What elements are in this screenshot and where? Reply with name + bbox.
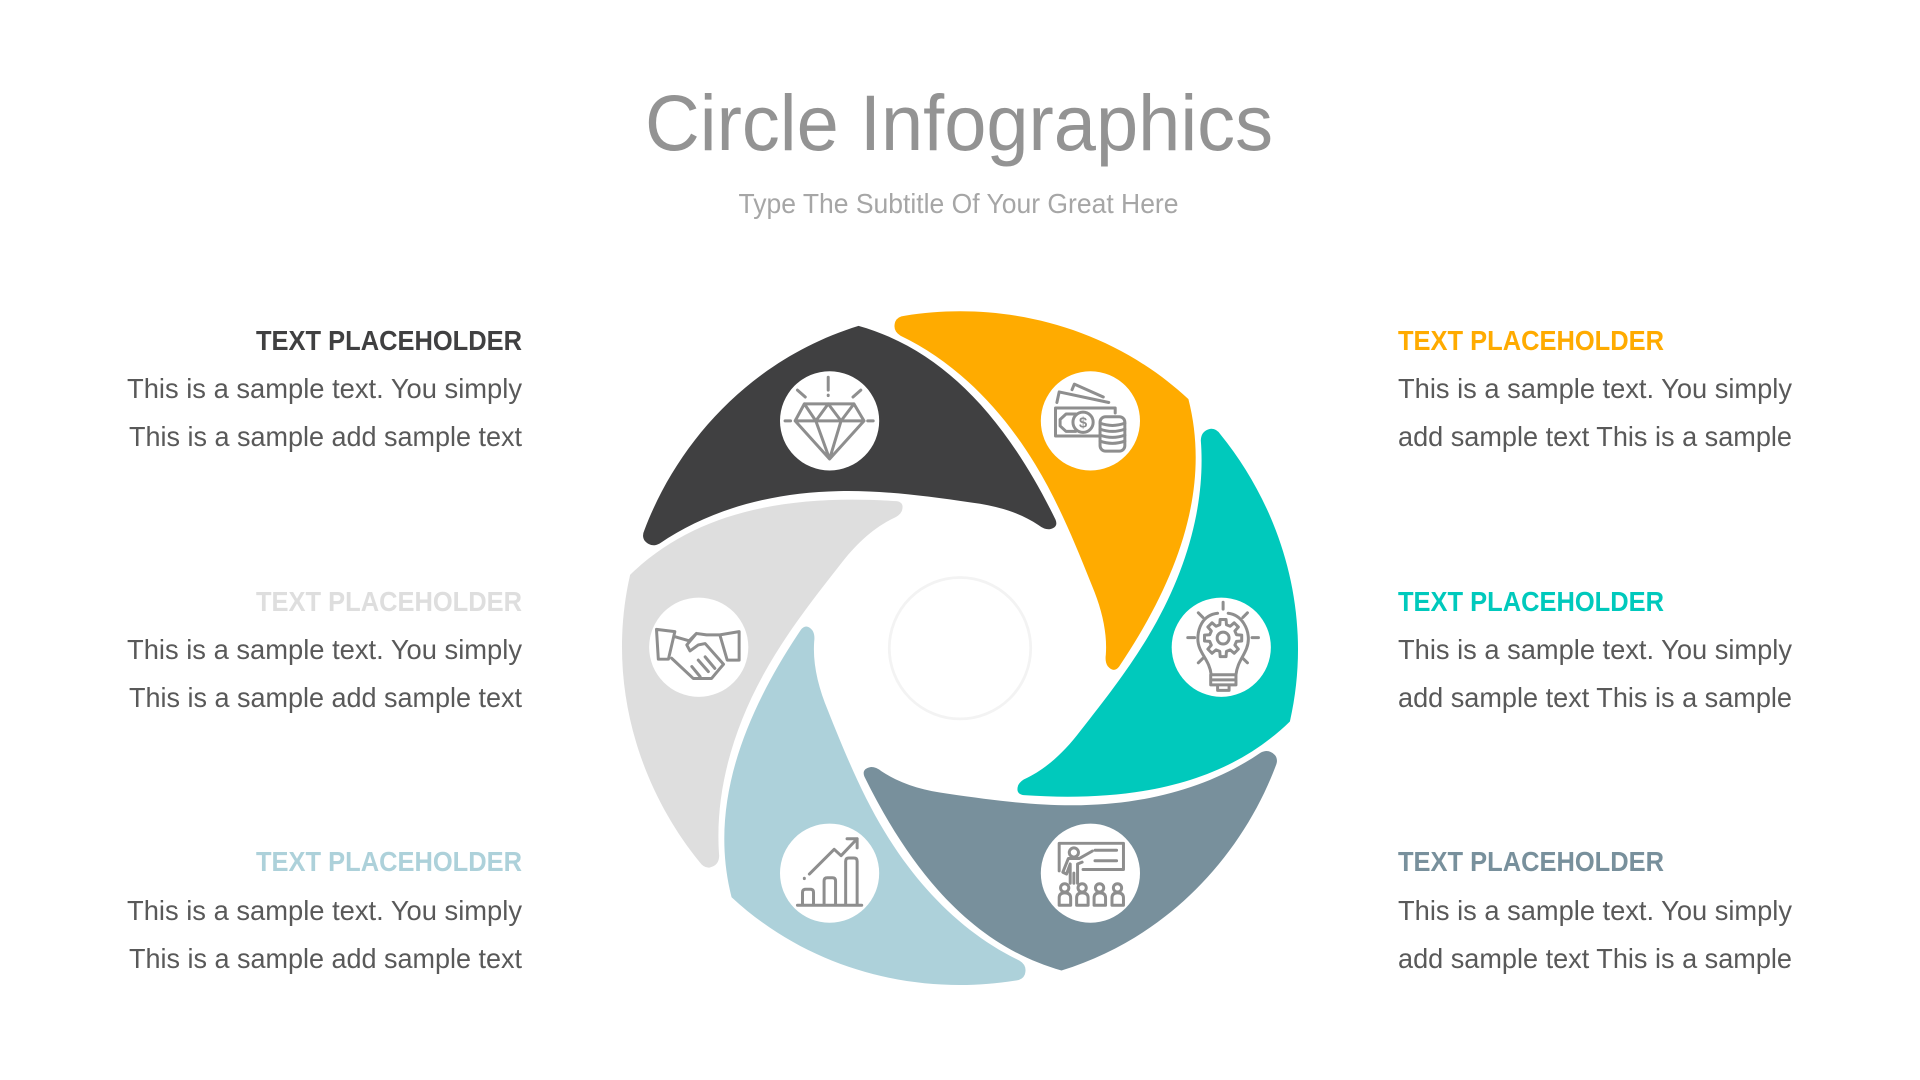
heading: orange: TEXT PLACEHOLDER [1398, 325, 1664, 356]
text block: orange, top right: add sample text This is a sample [1398, 421, 1792, 452]
text block: dark, top left: This is a sample add sample text [129, 421, 522, 452]
segment: light blue [633, 616, 1029, 1080]
heading: grey: TEXT PLACEHOLDER [256, 586, 522, 617]
text block: orange, top right: This is a sample text. You simply [1398, 373, 1792, 404]
icon: light bulb with gear [1172, 598, 1271, 697]
circular diagram [522, 212, 1398, 1080]
text block: slate, bottom right: add sample text This is a sample [1398, 943, 1792, 974]
text block: teal, middle right: add sample text This is a sample [1398, 682, 1792, 713]
segment: orange [891, 212, 1287, 680]
text block: light blue, bottom left: This is a sample add sample text [129, 943, 522, 974]
text block: dark, top left [127, 325, 522, 452]
heading: slate: TEXT PLACEHOLDER [1398, 846, 1664, 877]
icon: money and coins [1041, 371, 1140, 470]
segment: dark [643, 326, 1056, 545]
text block: slate, bottom right [1398, 846, 1792, 974]
heading: light blue: TEXT PLACEHOLDER [256, 846, 522, 877]
segment: teal [1001, 425, 1398, 893]
icon: growth chart [780, 824, 879, 923]
icon: handshake [649, 598, 748, 697]
text block: orange, top right [1398, 325, 1792, 452]
icon: diamond [780, 371, 879, 470]
text block: light blue, bottom left [127, 846, 522, 974]
heading: dark: TEXT PLACEHOLDER [256, 325, 522, 356]
icon: presenter and audience [1041, 824, 1140, 923]
text block: grey, middle left: This is a sample add sample text [129, 682, 522, 713]
segment: grey [522, 404, 919, 871]
segment: slate [864, 751, 1277, 971]
text block: light blue, bottom left: This is a sample text. You simply [127, 895, 522, 926]
title: Circle Infographics [645, 78, 1273, 167]
text block: teal, middle right: This is a sample text. You simply [1398, 634, 1792, 665]
text block: grey, middle left: This is a sample text. You simply [127, 634, 522, 665]
text block: slate, bottom right: This is a sample text. You simply [1398, 895, 1792, 926]
text block: grey, middle left [127, 586, 522, 713]
text block: dark, top left: This is a sample text. You simply [127, 373, 522, 404]
center circle [889, 577, 1031, 719]
text block: teal, middle right [1398, 586, 1792, 713]
icon: money and coins: $ [1079, 415, 1087, 431]
subtitle: Type The Subtitle Of Your Great Here [738, 188, 1178, 219]
heading: teal: TEXT PLACEHOLDER [1398, 586, 1664, 617]
